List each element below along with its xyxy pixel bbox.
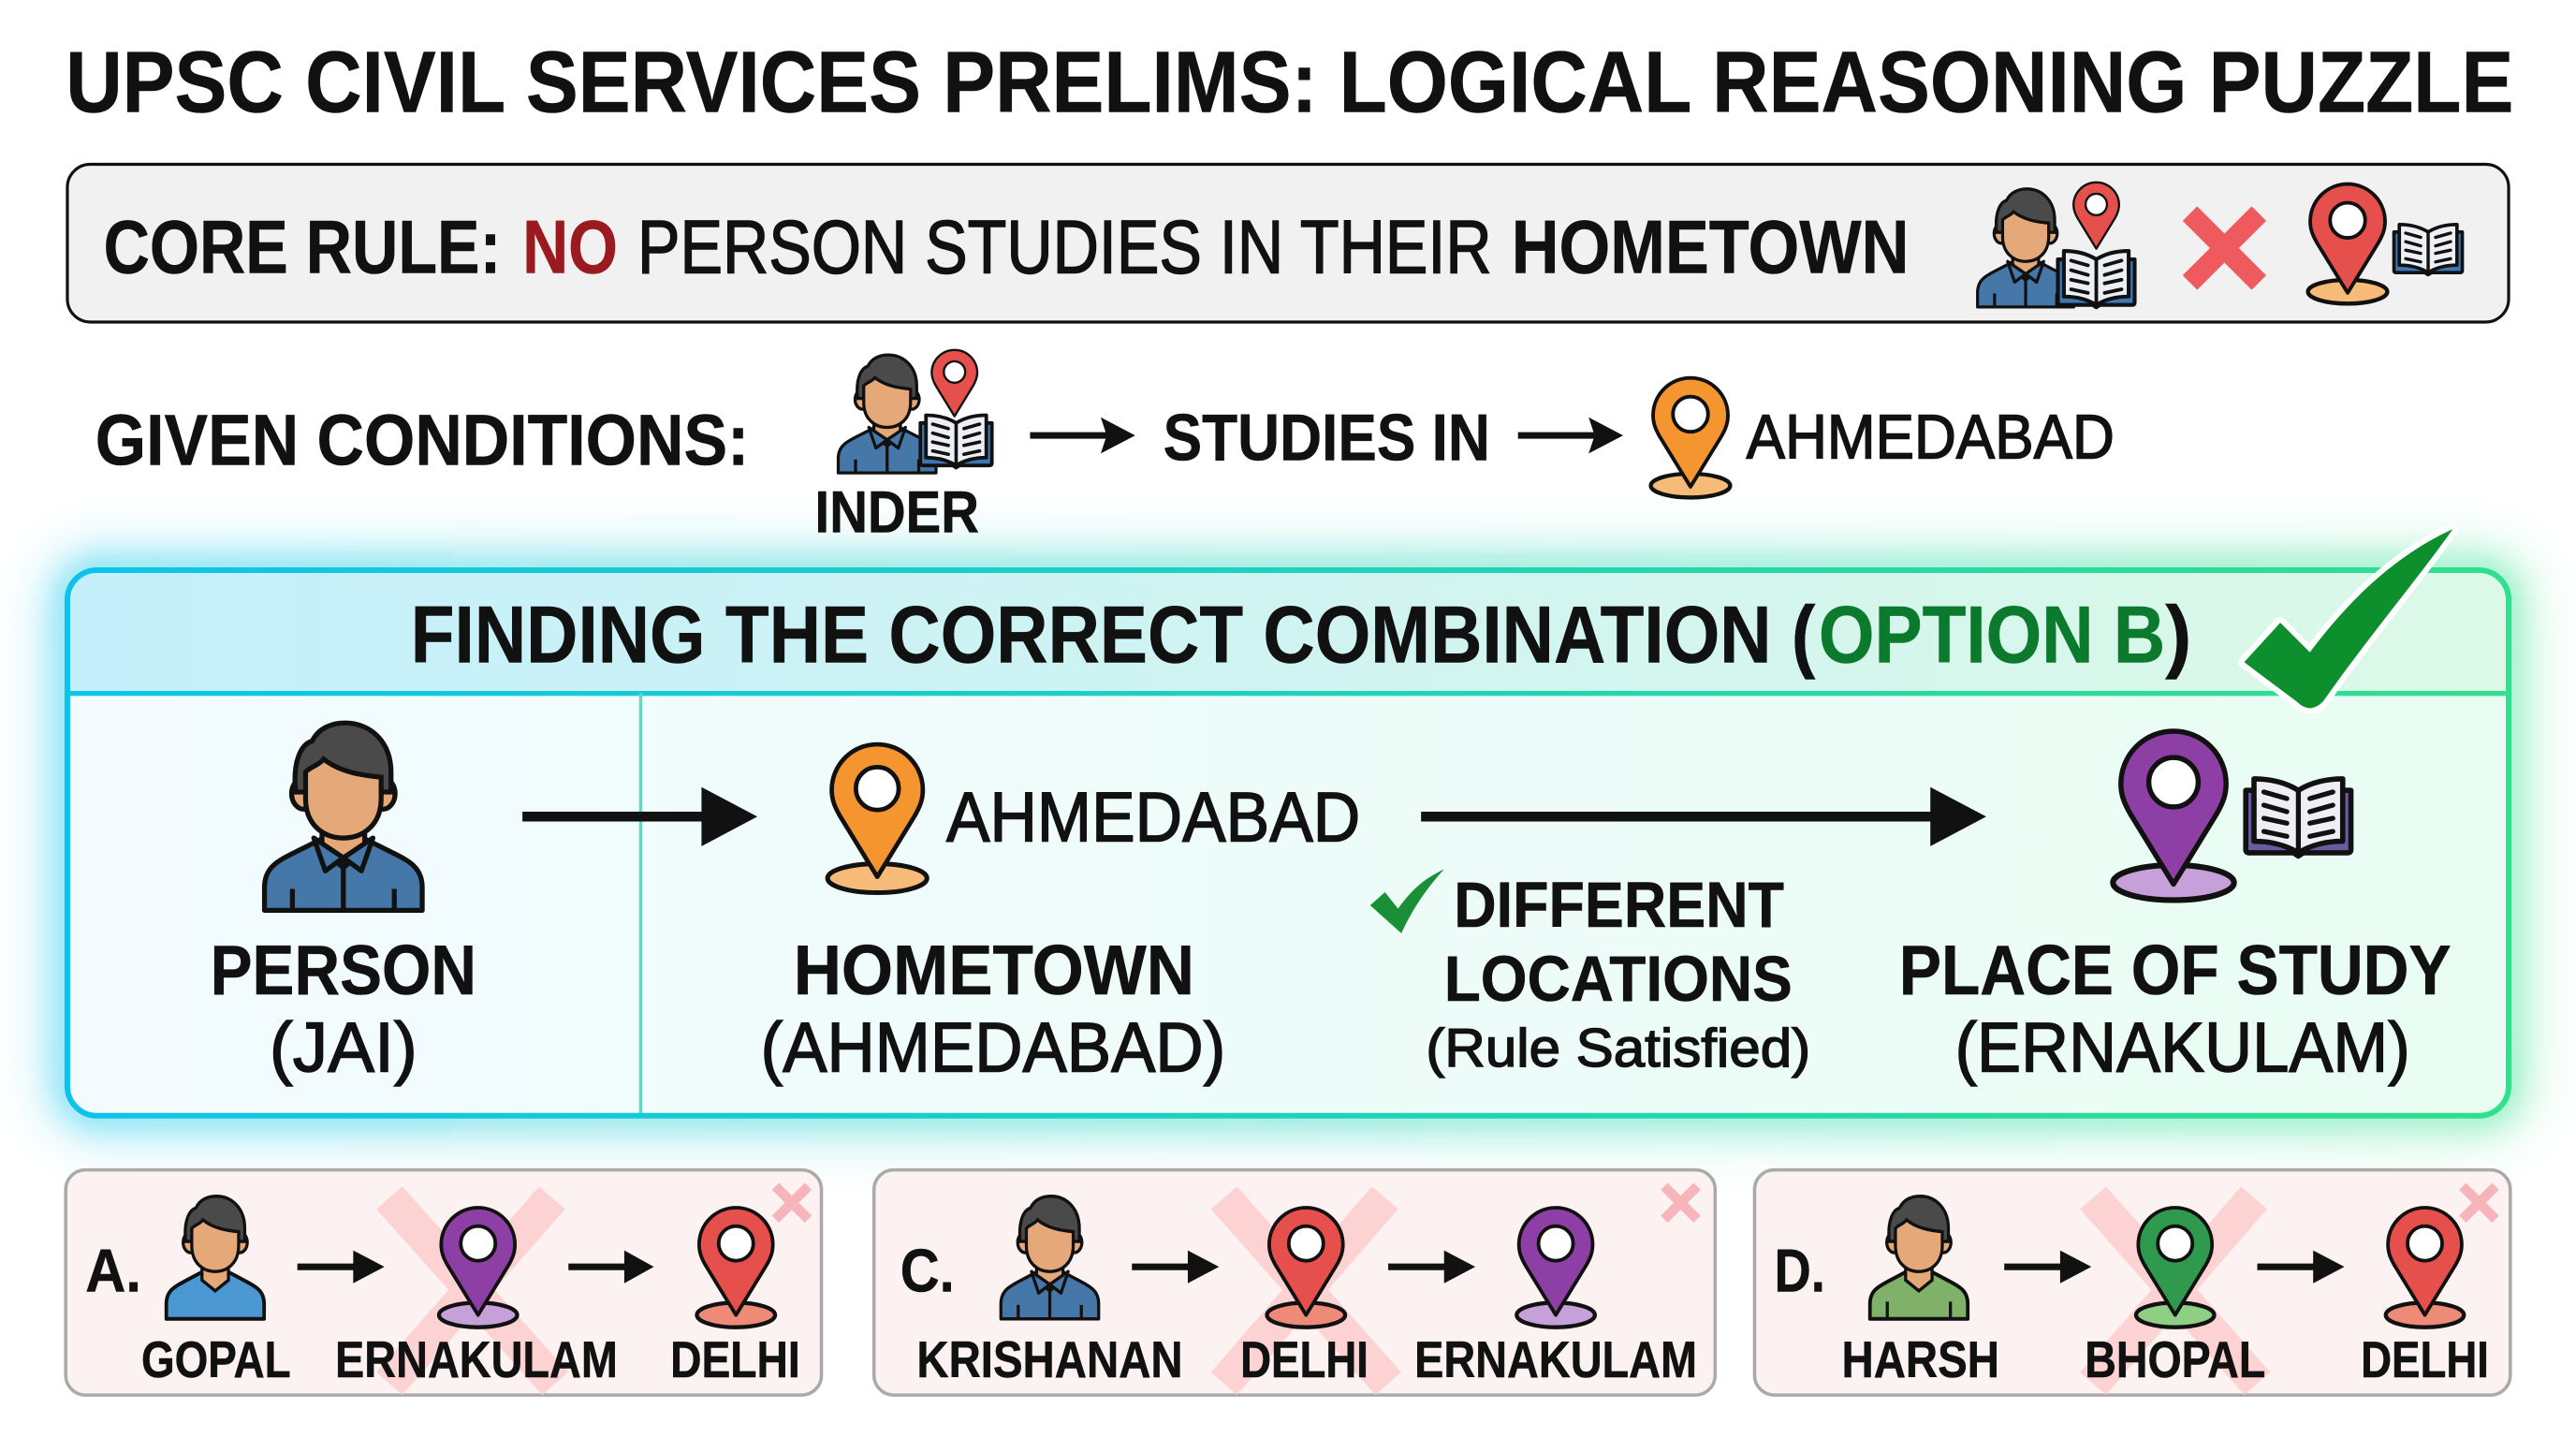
icon: orange pin xyxy=(1651,378,1730,497)
arrow xyxy=(568,1251,654,1284)
text: different locations: LOCATIONS xyxy=(1444,943,1793,1015)
label: Bhopal: BHOPAL xyxy=(2085,1331,2265,1388)
label: Ahmedabad value: (AHMEDABAD) xyxy=(761,1007,1225,1086)
icon: purple book xyxy=(2246,779,2351,856)
core rule word hometown: HOMETOWN xyxy=(1512,205,1909,289)
arrow: hometown to place of study xyxy=(1421,787,1986,846)
panel: option A xyxy=(66,1170,822,1395)
icon: large green check xyxy=(2244,529,2452,708)
panel glow behind combination panel xyxy=(67,570,2509,1116)
label: Ernakulam value: (ERNAKULAM) xyxy=(1955,1007,2410,1086)
arrow xyxy=(1388,1251,1475,1284)
arrow xyxy=(2004,1251,2091,1284)
label: Ernakulam: ERNAKULAM xyxy=(335,1331,618,1388)
label: Jai: (JAI) xyxy=(270,1007,417,1086)
text: different locations: (Rule Satisfied) xyxy=(1426,1019,1810,1078)
label: Krishanan: KRISHANAN xyxy=(916,1331,1183,1388)
arrow xyxy=(1132,1251,1219,1284)
icon: red cross xyxy=(2190,213,2259,283)
icon: person Gopal xyxy=(167,1196,264,1319)
text: different locations xyxy=(1426,869,1810,1078)
text: different locations: DIFFERENT xyxy=(1454,869,1784,941)
icon: red pin xyxy=(1267,1208,1345,1328)
icon: hometown pin with book xyxy=(2308,184,2463,303)
icon: small green check xyxy=(1370,869,1444,933)
panel: finding the correct combination xyxy=(67,529,2509,1116)
icon: purple study pin xyxy=(2113,731,2234,900)
option letter: C. xyxy=(900,1237,955,1305)
heading answer: option B: OPTION B xyxy=(1819,590,2165,680)
small cross xyxy=(775,1186,809,1219)
label: Delhi: DELHI xyxy=(1240,1331,1368,1388)
small cross xyxy=(2463,1186,2496,1219)
faded cross xyxy=(2093,1197,2258,1384)
icon: person Jai xyxy=(265,723,422,910)
arrow xyxy=(1030,418,1135,453)
icon: person Krishanan xyxy=(1001,1196,1099,1319)
given conditions row xyxy=(95,350,2115,546)
arrow: person to hometown xyxy=(522,787,757,846)
label: place of study: PLACE OF STUDY xyxy=(1899,931,2452,1009)
icon: orange hometown pin xyxy=(827,744,927,893)
panel header band xyxy=(67,570,2509,694)
faded cross xyxy=(1224,1197,1388,1384)
label: Ahmedabad: AHMEDABAD xyxy=(1747,404,2115,473)
label: Inder: INDER xyxy=(815,480,979,546)
label: Delhi: DELHI xyxy=(670,1331,800,1388)
icon: red pin xyxy=(2386,1208,2464,1328)
faded cross xyxy=(389,1197,555,1384)
small cross xyxy=(1664,1186,1697,1219)
option letter: A. xyxy=(85,1237,141,1305)
label: hometown: HOMETOWN xyxy=(794,931,1194,1009)
arrow xyxy=(2258,1251,2345,1284)
icon: purple pin xyxy=(1516,1208,1595,1328)
label: Ahmedabad: AHMEDABAD xyxy=(946,778,1360,857)
icon: red pin xyxy=(697,1208,775,1328)
panel: option D xyxy=(1754,1170,2510,1395)
core rule word NO: NO xyxy=(522,205,618,289)
core rule label: CORE RULE: xyxy=(104,205,501,289)
arrow xyxy=(298,1251,385,1284)
icon: person Harsh xyxy=(1870,1196,1968,1319)
panel: core rule xyxy=(67,165,2509,322)
icon: Inder with pin and book xyxy=(839,350,992,473)
label: Ernakulam: ERNAKULAM xyxy=(1414,1331,1697,1388)
heading closing bracket: ) xyxy=(2165,590,2191,680)
arrow xyxy=(1518,418,1623,453)
label: Gopal: GOPAL xyxy=(141,1331,291,1388)
label: Harsh: HARSH xyxy=(1841,1331,1999,1388)
label: person: PERSON xyxy=(211,931,476,1009)
panel: option C xyxy=(874,1170,1715,1395)
label: studies in: STUDIES IN xyxy=(1164,400,1490,474)
given conditions heading: GIVEN CONDITIONS: xyxy=(95,401,749,481)
panel heading: FINDING THE CORRECT COMBINATION ( xyxy=(411,590,1816,680)
option letter: D. xyxy=(1775,1237,1825,1305)
icon: green pin xyxy=(2136,1208,2215,1328)
core rule statement: PERSON STUDIES IN THEIR xyxy=(637,205,1492,289)
label: Delhi: DELHI xyxy=(2361,1331,2489,1388)
icon: purple pin xyxy=(439,1208,518,1328)
icon: person with hometown pin and book xyxy=(1978,183,2135,307)
